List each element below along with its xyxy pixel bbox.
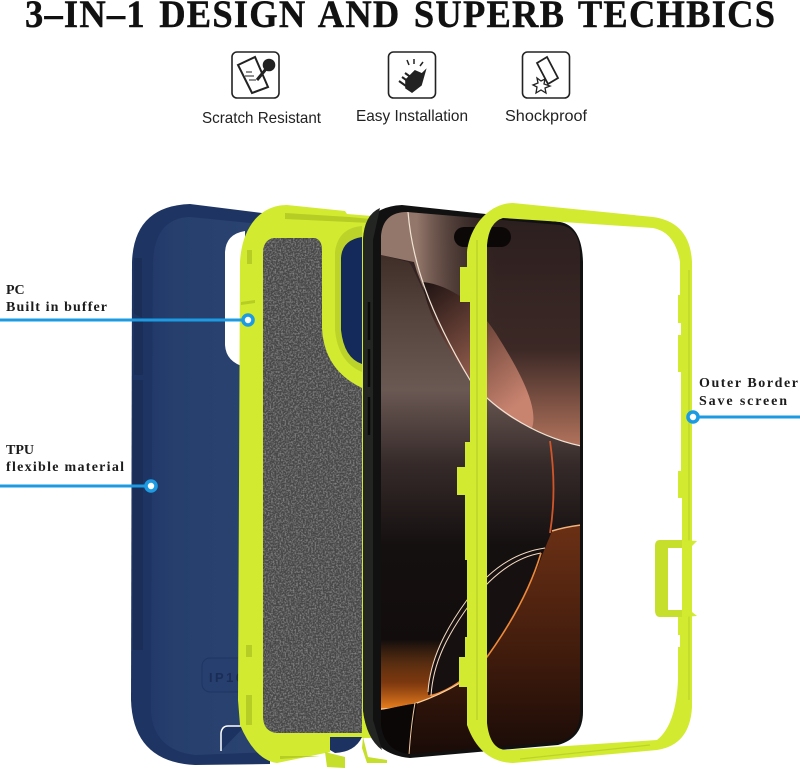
panel: lime outer border frame <box>457 203 697 763</box>
leader line <box>0 318 242 322</box>
callout: PC built in buffer <box>0 283 253 325</box>
callout: TPU flexible material: flexible material <box>6 460 124 475</box>
clip tab <box>655 540 683 617</box>
callout: PC built in buffer: PC <box>6 283 25 298</box>
callout: TPU flexible material: TPU <box>6 443 34 458</box>
label: shockproof: Shockproof <box>505 108 588 125</box>
lower slot <box>221 726 245 751</box>
marker <box>243 315 253 325</box>
panel: blue TPU outer shell <box>131 204 270 765</box>
label: easy installation: Easy Installation <box>356 108 468 125</box>
leader line <box>0 484 146 488</box>
feature: scratch resistant <box>202 52 322 127</box>
bottom clips <box>325 752 345 768</box>
feature: shockproof <box>505 52 588 125</box>
orange horizon glow <box>381 642 440 710</box>
camera opening <box>335 226 362 372</box>
callout: outer border save screen: Save screen <box>699 394 787 409</box>
dynamic island <box>454 227 511 247</box>
lens shape <box>423 282 533 428</box>
marker <box>146 481 156 491</box>
lower lens <box>428 644 465 695</box>
grey foam liner <box>263 238 362 733</box>
panel: phone <box>363 205 583 760</box>
screen wallpaper <box>381 205 581 760</box>
leader line <box>698 416 800 418</box>
side buttons <box>368 302 370 435</box>
logo badge <box>202 658 252 692</box>
label: scratch resistant: Scratch Resistant <box>202 110 322 127</box>
icon: scratch resistant <box>232 52 279 98</box>
callout: PC built in buffer: Built in buffer <box>6 300 107 315</box>
callout: outer border save screen: Outer Border <box>699 376 798 391</box>
feature: easy installation <box>356 52 468 125</box>
callout: outer border save screen <box>688 376 800 422</box>
navy notch <box>330 737 362 753</box>
phone body <box>363 205 583 758</box>
icon: easy installation <box>388 52 436 98</box>
white cutout <box>225 231 245 367</box>
marker <box>688 412 698 422</box>
callout: TPU flexible material <box>0 443 156 491</box>
lower planet <box>408 525 581 755</box>
panel: lime PC buffer frame <box>238 205 387 768</box>
panel: blue TPU outer shell: IP16 <box>209 670 243 685</box>
icon: shockproof <box>522 52 570 98</box>
